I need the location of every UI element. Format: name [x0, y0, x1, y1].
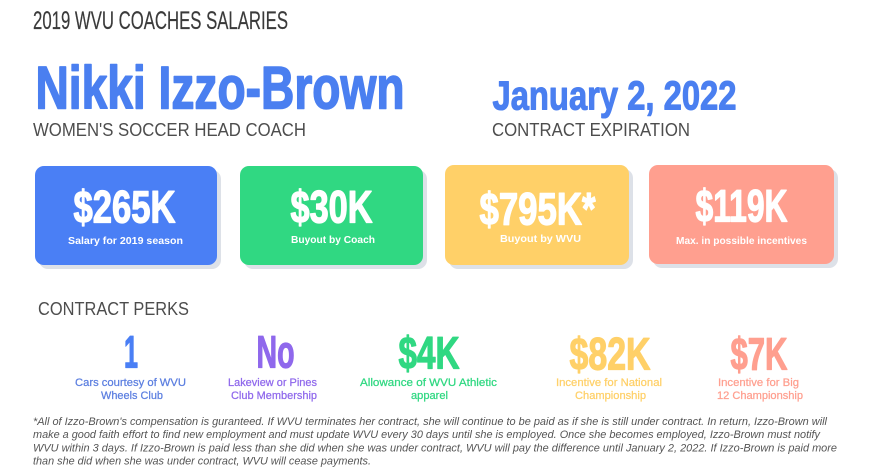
- panel: salary card: Salary for 2019 season: [68, 235, 183, 247]
- perk: club membership: [228, 326, 317, 402]
- perk: cars: [75, 326, 186, 402]
- perk: club membership: No: [256, 326, 294, 378]
- panel: WVU buyout card: $795K*: [480, 184, 596, 234]
- perk: Big 12 championship incentive: [717, 328, 803, 402]
- footnote text block: WVU within 3 days. If Izzo-Brown is paid less than she did when she was under contract, WVU will pay the difference until January 2, 2022. If Izzo-Brown is paid more: [33, 442, 837, 454]
- title: 2019 WVU COACHES SALARIES: [33, 7, 288, 35]
- perk: apparel allowance: Allowance of WVU Athletic: [360, 377, 498, 389]
- panel: incentives card: [649, 165, 838, 268]
- perk: club membership: Club Membership: [231, 390, 317, 402]
- heading: contract perks: CONTRACT PERKS: [38, 299, 189, 319]
- perk: national championship incentive: [556, 328, 662, 402]
- panel: salary card: [35, 166, 221, 269]
- perk: club membership: Lakeview or Pines: [228, 377, 317, 389]
- perk: cars: Wheels Club: [101, 390, 163, 402]
- panel: incentives card: Max. in possible incentives: [676, 235, 807, 247]
- coach role: WOMEN'S SOCCER HEAD COACH: [33, 120, 306, 140]
- perk: apparel allowance: apparel: [411, 390, 448, 402]
- footnote text block: [33, 416, 837, 468]
- footnote text block: *All of Izzo-Brown's compensation is guranteed. If WVU terminates her contract, she will continue to be paid as if she is still under contract. In return, Izzo-Brown will: [33, 416, 828, 428]
- perk: Big 12 championship incentive: $7K: [730, 328, 788, 380]
- perk: apparel allowance: [360, 328, 498, 402]
- footnote text block: make a good faith effort to find new employment and must update WVU every 30 days until she is employed. Once she becomes employed, Izzo-Brown must notify: [33, 429, 821, 441]
- heading: coach name: Nikki Izzo-Brown: [36, 54, 404, 122]
- footnote text block: than she did when she was under contract, WVU will cease payments.: [33, 456, 371, 468]
- panel: WVU buyout card: [445, 165, 633, 269]
- perk: Big 12 championship incentive: 12 Championship: [717, 390, 803, 402]
- perk: national championship incentive: Incentive for National: [556, 377, 662, 389]
- heading: contract expiration date: January 2, 2022: [492, 72, 736, 118]
- panel: coach buyout card: Buyout by Coach: [291, 234, 375, 246]
- panel: incentives card: $119K: [696, 180, 788, 232]
- contract expiration label: CONTRACT EXPIRATION: [492, 120, 690, 140]
- panel: coach buyout card: $30K: [290, 182, 373, 232]
- panel: coach buyout card: [240, 166, 427, 269]
- perk: national championship incentive: Championship: [575, 390, 646, 402]
- perk: cars: 1: [124, 326, 138, 378]
- perk: apparel allowance: $4K: [398, 328, 460, 378]
- panel: WVU buyout card: Buyout by WVU: [500, 233, 581, 245]
- panel: salary card: $265K: [74, 182, 176, 232]
- perk: national championship incentive: $82K: [570, 328, 651, 380]
- perk: Big 12 championship incentive: Incentive for Big: [718, 377, 799, 389]
- perk: cars: Cars courtesy of WVU: [75, 377, 186, 389]
